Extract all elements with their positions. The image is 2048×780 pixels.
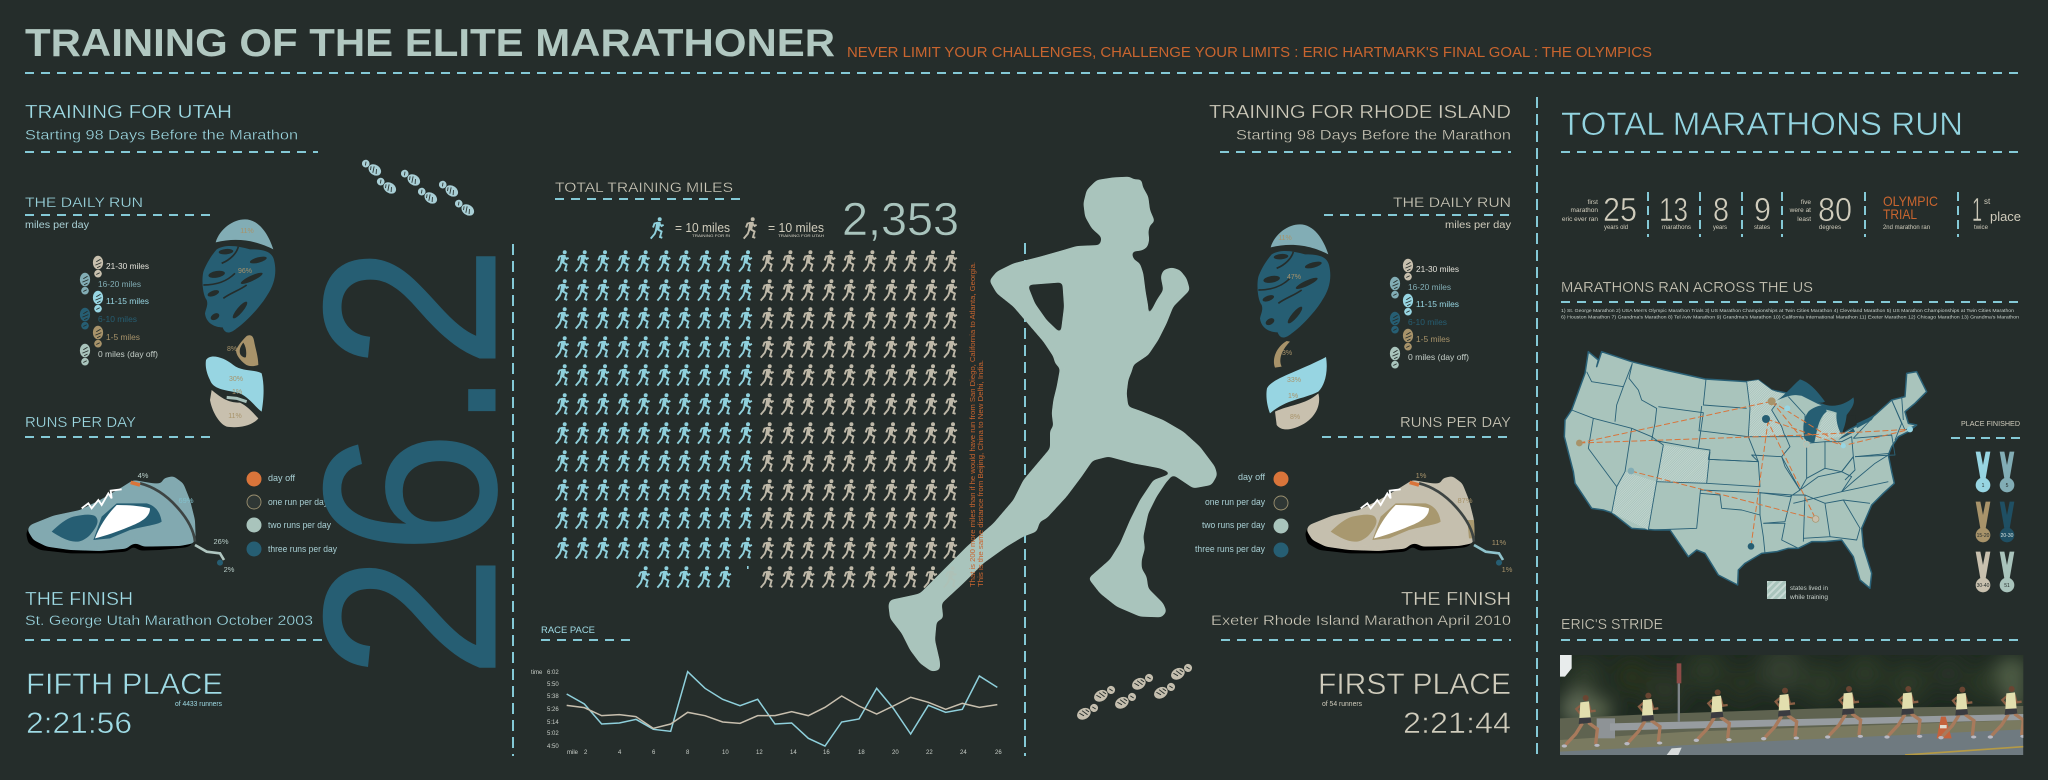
note: RI runners: of 54 runners xyxy=(1322,701,1362,708)
stats row: 9 xyxy=(1754,191,1771,228)
axis labels: 24 xyxy=(960,750,967,756)
text: RI miles per day: miles per day xyxy=(1445,220,1511,231)
panel: race pace chart xyxy=(531,625,1002,756)
legend: RI runs: three runs per day xyxy=(1195,544,1265,555)
heading: marathons across the US: MARATHONS RAN ACROSS THE US xyxy=(1561,279,1813,296)
legend: runner symbols: = 10 miles xyxy=(675,221,730,235)
map legend: while training xyxy=(1789,595,1828,601)
note: distance comparison: That is 200 more miles than if he would have run from San Diego, California to Atlanta, Georgia. xyxy=(968,262,977,587)
axis labels: 12 xyxy=(756,750,763,756)
stats row: 8 xyxy=(1713,191,1729,228)
stats row xyxy=(1562,191,2021,231)
heading: Eric's stride: ERIC'S STRIDE xyxy=(1561,616,1663,633)
legend: RI miles: 11-15 miles xyxy=(1416,299,1459,309)
chart: Utah shoe: 69% xyxy=(178,496,194,505)
medals: place finished xyxy=(1951,419,2022,592)
axis labels: time xyxy=(531,670,543,676)
heading: RI runs per day: RUNS PER DAY xyxy=(1400,414,1511,431)
chart: runner pictogram xyxy=(556,250,957,588)
note: distance comparison: This is the same distance from Beijing, China to New Delhi, India. xyxy=(976,360,985,587)
chart: RI shoe sole: 8% xyxy=(1290,414,1300,421)
axis labels: 5:26 xyxy=(547,707,559,713)
stats row: OLYMPIC xyxy=(1883,193,1938,209)
legend: Utah miles xyxy=(80,256,158,365)
legend: RI runs: day off xyxy=(1238,472,1265,483)
heading: RI daily run: THE DAILY RUN xyxy=(1393,194,1511,210)
chart: Utah shoe sole: 1% xyxy=(232,389,242,396)
stats row: states xyxy=(1754,224,1771,231)
axis labels: 10 xyxy=(722,750,729,756)
legend: runner symbols: TRAINING FOR RI xyxy=(692,233,730,238)
stats row: place xyxy=(1990,209,2021,224)
text: marathon list: 6) Houston Marathon 7) Grandma's Marathon 8) Tel Aviv Marathon 9) Grandma's Marathon 10) California International Marathon 11) Exeter Marathon 12) Chicago Marathon 13) Grandma's Marathon xyxy=(1561,314,2019,320)
legend: Utah runs: two runs per day xyxy=(268,520,331,531)
result: first place: FIRST PLACE xyxy=(1318,668,1511,701)
axis labels: 6:02 xyxy=(547,670,559,676)
heading: Utah finish: THE FINISH xyxy=(25,589,133,609)
stats row: 1 xyxy=(1972,191,1982,228)
map legend xyxy=(1767,581,1828,601)
axis labels: 6 xyxy=(652,750,656,756)
stats row: st xyxy=(1984,197,1991,206)
subheading: RI start: Starting 98 Days Before the Marathon xyxy=(1236,128,1511,142)
chart: RI shoe sole: 3% xyxy=(1282,350,1292,357)
axis labels: 20 xyxy=(892,750,899,756)
map legend: states lived in xyxy=(1790,586,1828,592)
big number 26.2: 26.2 xyxy=(273,246,548,678)
chart: RI shoe sole: 11% xyxy=(1278,235,1292,242)
chart: RI shoe sole: 1% xyxy=(1288,393,1298,400)
stats row: marathon xyxy=(1571,207,1598,214)
text: marathon list: 1) St. George Marathon 2) USA Men's Olympic Marathon Trials 3) US Marathon Championships at Twin Cities Marathon 4) Cleveland Marathon 5) US Marathon Championships at Twin Cities Marathon xyxy=(1561,308,2014,313)
chart: RI shoe xyxy=(1305,471,1513,574)
stats row: years xyxy=(1713,224,1728,231)
medals: place finished: 51 xyxy=(2004,583,2010,589)
result: fifth place: FIFTH PLACE xyxy=(26,668,223,701)
axis labels: 18 xyxy=(858,750,865,756)
axis labels: 5:02 xyxy=(547,731,559,737)
chart: Utah shoe: 26% xyxy=(213,537,229,546)
panel: training for Utah xyxy=(25,102,337,574)
medals: place finished: 30-40 xyxy=(1977,583,1990,589)
legend: Utah runs: three runs per day xyxy=(268,544,337,555)
text: Utah miles per day: miles per day xyxy=(25,220,89,231)
heading: training for Rhode Island: TRAINING FOR RHODE ISLAND xyxy=(1209,102,1511,122)
legend: Utah miles: 21-30 miles xyxy=(106,261,149,271)
legend: RI runs xyxy=(1195,472,1288,558)
legend: Utah runs xyxy=(246,472,337,556)
number: total miles: 2,353 xyxy=(842,193,959,245)
legend: RI runs: one run per day xyxy=(1205,497,1265,508)
icon: footprints Utah xyxy=(360,157,476,218)
stats row: twice xyxy=(1974,224,1988,231)
heading: total training miles: TOTAL TRAINING MILES xyxy=(555,179,733,195)
stats row: TRIAL xyxy=(1883,206,1917,222)
axis labels: 26 xyxy=(995,750,1002,756)
stats row: 80 xyxy=(1818,191,1852,228)
stats row: 25 xyxy=(1603,191,1637,228)
legend: runner symbols xyxy=(651,217,824,239)
stats row: marathons xyxy=(1662,224,1692,231)
icon: footprints Rhode Island xyxy=(1075,661,1194,722)
chart: Utah shoe sole: 11% xyxy=(240,228,254,235)
legend: Utah runs: day off xyxy=(268,473,295,484)
stats row: eric ever ran xyxy=(1562,216,1598,223)
medals: place finished: 20-30 xyxy=(2001,533,2014,539)
chart: Utah shoe sole: 8% xyxy=(227,346,237,353)
legend: Utah miles: 11-15 miles xyxy=(106,296,149,306)
panel: Utah finish xyxy=(25,589,325,740)
stats row: least xyxy=(1797,216,1811,223)
stats row: 2nd marathon ran xyxy=(1883,224,1930,231)
axis labels: 5:38 xyxy=(547,694,559,700)
axis labels: 5:14 xyxy=(547,720,559,726)
runner silhouette xyxy=(888,177,1217,672)
lines xyxy=(567,672,997,746)
panel: total training miles xyxy=(555,179,959,588)
legend: RI runs: two runs per day xyxy=(1202,520,1265,531)
chart: Utah shoe: 2% xyxy=(224,565,235,574)
legend: runner symbols: TRAINING FOR UTAH xyxy=(778,233,824,238)
result: Utah time: 2:21:56 xyxy=(26,707,132,740)
note: Utah runners: of 4433 runners xyxy=(175,701,222,708)
chart: RI shoe sole xyxy=(1257,224,1330,429)
stats row: were at xyxy=(1789,207,1811,214)
panel: total marathons run xyxy=(1560,106,2028,755)
legend: RI miles: 16-20 miles xyxy=(1408,282,1451,292)
text: RI race: Exeter Rhode Island Marathon April 2010 xyxy=(1211,613,1511,628)
chart: RI shoe: 11% xyxy=(1492,538,1507,547)
chart: RI shoe: 1% xyxy=(1502,565,1513,574)
chart: Utah shoe sole: 96% xyxy=(238,268,252,275)
axis labels: 22 xyxy=(926,750,933,756)
subheading: Utah start: Starting 98 Days Before the Marathon xyxy=(25,128,298,142)
legend: Utah miles: 16-20 miles xyxy=(98,279,141,289)
stats row: years old xyxy=(1604,224,1628,231)
medals: place finished: 5 xyxy=(2006,483,2009,489)
axis labels: 16 xyxy=(823,750,830,756)
chart: RI shoe: 1% xyxy=(1416,471,1427,480)
subtitle: NEVER LIMIT YOUR CHALLENGES, CHALLENGE YOUR LIMITS : ERIC HARTMARK'S FINAL GOAL : THE OLYMPICS xyxy=(847,45,1652,61)
medals: place finished: 15-20 xyxy=(1977,533,1990,539)
heading: Utah runs per day: RUNS PER DAY xyxy=(25,414,136,431)
result: RI time: 2:21:44 xyxy=(1403,707,1511,740)
panel: training for Rhode Island xyxy=(1195,102,1513,740)
axis labels: 8 xyxy=(686,750,690,756)
photo: Eric's stride sequence xyxy=(1560,647,2028,755)
medals: place finished: 1 xyxy=(1982,483,1985,489)
heading: Utah daily run: THE DAILY RUN xyxy=(25,194,143,210)
main title: TRAINING OF THE ELITE MARATHONER xyxy=(25,22,835,65)
axis labels: 4:50 xyxy=(547,744,559,750)
legend: RI miles: 1-5 miles xyxy=(1416,334,1450,344)
axis labels: 4 xyxy=(618,750,622,756)
chart: Utah shoe sole xyxy=(202,219,275,427)
legend: RI miles: 0 miles (day off) xyxy=(1408,352,1469,362)
text: Utah race: St. George Utah Marathon October 2003 xyxy=(25,613,313,628)
stats row: five xyxy=(1801,199,1811,206)
note: distance comparison xyxy=(968,262,985,587)
chart: RI shoe sole: 47% xyxy=(1287,274,1301,281)
axis labels: 2 xyxy=(584,750,588,756)
chart: RI shoe sole: 33% xyxy=(1287,377,1301,384)
legend: Utah miles: 6-10 miles xyxy=(98,314,137,324)
chart: Utah shoe sole: 11% xyxy=(228,413,242,420)
heading: training for Utah: TRAINING FOR UTAH xyxy=(25,102,232,122)
axis labels xyxy=(531,670,1002,756)
legend: Utah miles: 1-5 miles xyxy=(106,332,140,342)
heading: RI finish: THE FINISH xyxy=(1401,589,1511,609)
axis labels: 14 xyxy=(790,750,797,756)
legend: Utah miles: 0 miles (day off) xyxy=(98,349,158,359)
axis labels: 5:50 xyxy=(547,682,559,688)
chart: Utah shoe: 4% xyxy=(138,471,149,480)
chart: Utah shoe xyxy=(26,471,235,574)
legend: RI miles: 21-30 miles xyxy=(1416,264,1459,274)
stats row: first xyxy=(1588,199,1598,206)
legend: RI miles: 6-10 miles xyxy=(1408,317,1447,327)
map: United States xyxy=(1564,352,1927,588)
heading: total marathons run: TOTAL MARATHONS RUN xyxy=(1561,106,1963,142)
heading: race pace: RACE PACE xyxy=(541,625,595,635)
axis labels: mile xyxy=(567,750,579,756)
medals: place finished: PLACE FINISHED xyxy=(1961,419,2021,428)
chart: RI shoe: 87% xyxy=(1457,496,1473,505)
text: marathon list xyxy=(1561,308,2019,320)
chart: Utah shoe sole: 30% xyxy=(229,376,243,383)
stats row: 13 xyxy=(1659,191,1688,228)
legend: Utah runs: one run per day xyxy=(268,497,328,508)
legend: runner symbols: = 10 miles xyxy=(768,221,824,235)
legend: RI miles xyxy=(1390,259,1469,368)
stats row: degrees xyxy=(1819,224,1842,231)
